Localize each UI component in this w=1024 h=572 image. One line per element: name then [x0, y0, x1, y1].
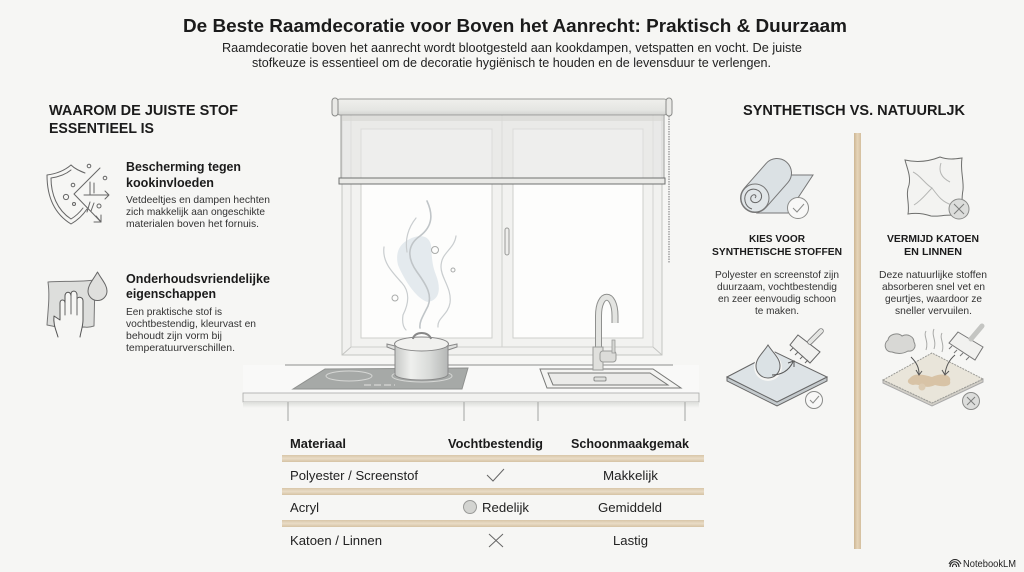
row: acryl [290, 500, 662, 515]
panel: natuurlijk [879, 157, 987, 410]
roller blind [332, 98, 672, 263]
text: natuurlijk uitleg [879, 269, 987, 317]
table: materiaalvergelijking [282, 437, 704, 548]
heading: kies voor synthetische stoffen: SYNTHETISCHE STOFFEN [712, 246, 842, 258]
window frame [342, 115, 662, 355]
heading: waarom [49, 102, 238, 137]
text: bescherming: zich makkelijk aan ongeschikte [126, 206, 265, 218]
row: polyester: Polyester / Screenstof [290, 468, 418, 483]
heading: synthetisch vs natuurlijk: SYNTHETISCH VS. NATUURLJK [743, 102, 965, 119]
cooktop [293, 368, 468, 389]
heading: kies voor synthetische stoffen: KIES VOOR [749, 233, 805, 245]
icon: shield [47, 164, 109, 224]
text: onderhoud: behoudt zijn vorm bij [126, 330, 222, 342]
icon: wrinkled cloth [905, 157, 969, 219]
illustration: kitchen window [243, 98, 699, 421]
text: synthetisch uitleg [715, 269, 839, 317]
text: bescherming: kookinvloeden [126, 176, 214, 190]
row: acryl: Gemiddeld [598, 500, 662, 515]
heading: kies voor synthetische stoffen [712, 233, 842, 258]
table header: Schoonmaakgemak [571, 437, 689, 451]
icon: fabric roll [741, 173, 813, 218]
intro text [222, 41, 802, 70]
icon: cloth, hand and drop [47, 272, 107, 337]
icon: water-repellent surface and brush [727, 331, 827, 408]
divider: wooden bar [854, 133, 861, 549]
heading: vermijd katoen en linnen: EN LINNEN [904, 246, 962, 258]
heading: vermijd katoen en linnen: VERMIJD KATOEN [887, 233, 979, 245]
panel: synthetisch [712, 173, 842, 408]
row: katoen: Katoen / Linnen [290, 533, 382, 548]
heading: vermijd katoen en linnen [887, 233, 979, 258]
row: polyester: Makkelijk [603, 468, 658, 483]
countertop [243, 365, 699, 421]
faucet [593, 297, 616, 370]
sink [540, 369, 681, 388]
text: natuurlijk uitleg: Deze natuurlijke stoffen [879, 269, 987, 281]
brand: NotebookLM: NotebookLM [963, 558, 1016, 570]
text: bescherming [126, 160, 270, 230]
text: onderhoud: Een praktische stof is [126, 306, 222, 318]
pot [387, 333, 457, 380]
text: bescherming: Vetdeeltjes en dampen hechten [126, 194, 270, 206]
table header: Vochtbestendig [448, 437, 543, 451]
heading: waarom: ESSENTIEEL IS [49, 120, 154, 137]
row: katoen: Lastig [613, 533, 648, 548]
text: bescherming: materialen boven het fornuis. [126, 218, 259, 230]
window handle [505, 228, 509, 255]
text: natuurlijk uitleg: sneller vervuilen. [895, 305, 972, 317]
row: acryl: Redelijk [482, 500, 530, 515]
row: katoen [290, 533, 648, 548]
text: synthetisch uitleg: duurzaam, vochtbestendig [717, 281, 837, 293]
table header: Materiaal [290, 437, 346, 451]
text: onderhoud: Onderhoudsvriendelijke [126, 272, 270, 286]
text: synthetisch uitleg: en zeer eenvoudig schoon [718, 293, 836, 305]
heading: waarom: WAAROM DE JUISTE STOF [49, 102, 238, 119]
text: onderhoud: temperatuurverschillen. [126, 342, 235, 354]
text: synthetisch uitleg: Polyester en screenstof zijn [715, 269, 839, 281]
intro text: stofkeuze is essentieel om de decoratie hygiënisch te houden en de levensduur te verlengen. [252, 56, 771, 70]
text: onderhoud: vochtbestendig, kleurvast en [126, 318, 256, 330]
panel: waarom de juiste stof [47, 102, 270, 354]
intro text: Raamdecoratie boven het aanrecht wordt blootgesteld aan kookdampen, vetspatten en vocht. De juiste [222, 41, 802, 55]
table header [290, 437, 689, 451]
text: onderhoud [126, 272, 270, 354]
text: bescherming: Bescherming tegen [126, 160, 241, 174]
text: synthetisch uitleg: te maken. [755, 305, 799, 317]
text: natuurlijk uitleg: geurtjes, waardoor ze [885, 293, 982, 305]
title: De Beste Raamdecoratie voor Boven het Aanrecht: Praktisch & Duurzaam [183, 16, 847, 36]
row: acryl: Acryl [290, 500, 319, 515]
steam [384, 201, 456, 330]
icon: stained fabric with smoke and brush [883, 326, 983, 410]
row: polyester [290, 468, 658, 483]
text: natuurlijk uitleg: absorberen snel vet en [882, 281, 985, 293]
text: onderhoud: eigenschappen [126, 287, 216, 301]
